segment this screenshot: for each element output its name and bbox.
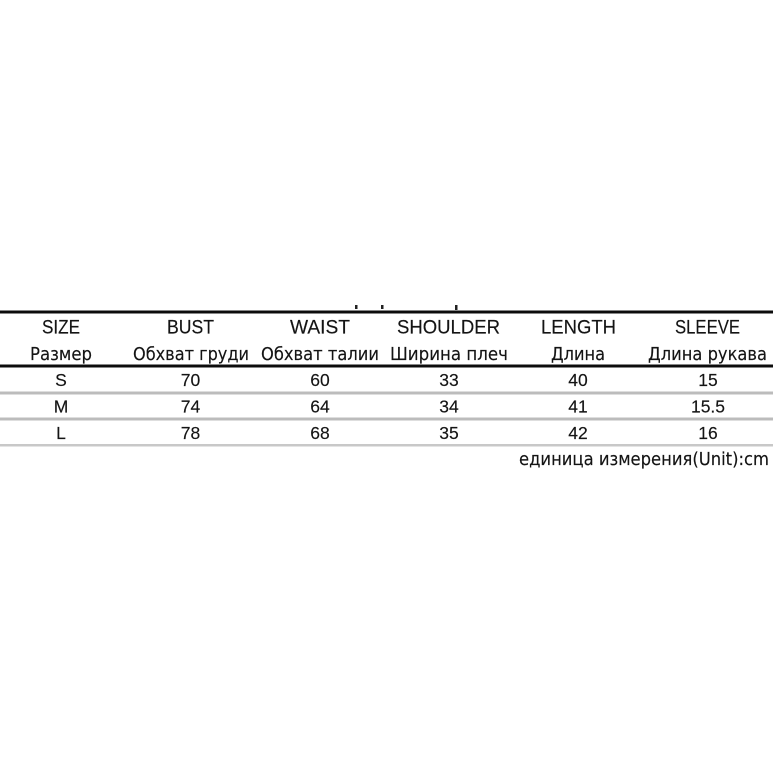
row: size S: 15 [698,370,718,390]
header row: English labels: LENGTH [541,318,616,338]
row: size M: 74 [181,396,200,416]
header row: English labels: SIZE [42,318,80,338]
header row: English labels [42,318,740,338]
row: size S: 40 [568,370,588,390]
header row: Russian labels: Размер [30,345,92,365]
header row: Russian labels: Обхват груди [133,345,249,365]
header row: English labels: BUST [167,318,214,338]
header row: Russian labels [30,345,767,365]
row: size S: 33 [439,370,459,390]
row: size M: 41 [568,396,588,416]
row: size L: 35 [439,423,459,443]
header row: Russian labels: Обхват талии [261,345,379,365]
row: size M: M [54,396,68,416]
row: size L: 16 [698,423,718,443]
row: size M: 15.5 [691,396,725,416]
header row: Russian labels: Длина [551,345,605,365]
row: size L: 68 [310,423,330,443]
row: size S [55,370,718,390]
row: size L: 78 [181,423,200,443]
header row: Russian labels: Ширина плеч [390,345,508,365]
row: size M [54,396,725,416]
header row: English labels: SHOULDER [397,318,500,338]
row: size S: S [55,370,67,390]
header row: Russian labels: Длина рукава [648,345,767,365]
header row: English labels: WAIST [290,318,350,338]
header row: English labels: SLEEVE [675,318,740,338]
row: size S: 70 [181,370,200,390]
row: size M: 64 [310,396,330,416]
row: size S: 60 [310,370,330,390]
row: size L: 42 [568,423,588,443]
row: size M: 34 [439,396,459,416]
row: size L: L [56,423,66,443]
row: size L [56,423,718,443]
